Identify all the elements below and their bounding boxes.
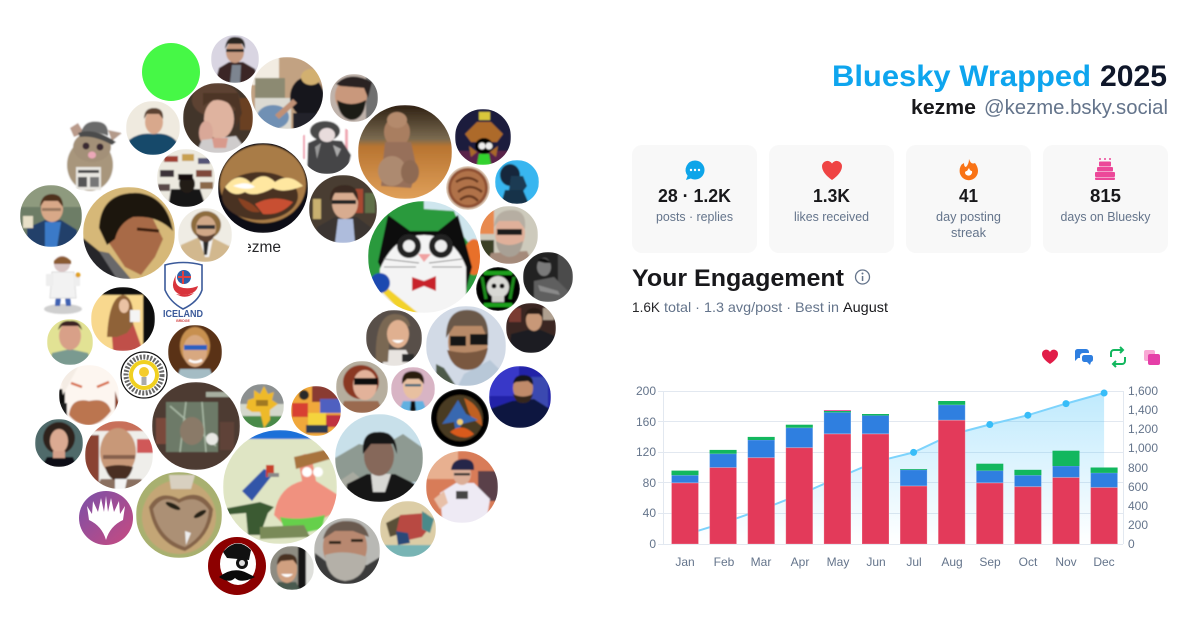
right axis labels xyxy=(1128,384,1158,551)
avatar: man in glasses and blazer xyxy=(211,35,259,83)
stat card: days on Bluesky: 815 xyxy=(1090,186,1121,206)
avatar: smiling man with blue glasses xyxy=(168,325,222,379)
icon: flame xyxy=(960,159,978,180)
icon: likes xyxy=(1042,350,1058,364)
cumulative line xyxy=(685,393,1104,535)
avatar: black-and-white portrait xyxy=(523,252,573,302)
avatar: man in profile with dark hair xyxy=(83,187,175,279)
avatar: red-haired woman in glasses xyxy=(336,361,388,413)
month labels: Aug xyxy=(941,555,963,569)
avatar: Pixies album cover xyxy=(152,382,240,470)
engagement summary: total · 1.3 avg/post · Best in xyxy=(664,299,839,315)
chart grid xyxy=(658,391,1124,544)
stat card: likes received xyxy=(769,145,894,253)
left axis labels: 40 xyxy=(643,506,656,520)
engagement summary xyxy=(632,299,888,315)
icon: chat bubble xyxy=(686,160,705,180)
right axis labels: 0 xyxy=(1128,537,1135,551)
stat card: posts and replies: 28 · 1.2K xyxy=(658,186,731,206)
stat card: day posting streak: day posting xyxy=(936,209,1001,224)
avatar: anime figure in black and white xyxy=(300,120,354,174)
avatar: laughing woman xyxy=(366,310,422,366)
avatar: person with camera before bookshelf xyxy=(157,149,215,207)
right axis labels: 400 xyxy=(1128,499,1148,513)
avatar: angry sun over football team xyxy=(240,384,284,428)
left axis labels: 0 xyxy=(649,537,656,551)
avatar: copper coin xyxy=(446,166,490,210)
icon: reposts xyxy=(1111,347,1125,367)
avatar: older man with grey beard xyxy=(314,518,380,584)
right axis labels: 800 xyxy=(1128,461,1148,475)
avatar: smiling curly-haired woman xyxy=(35,419,83,467)
icon: quotes xyxy=(1144,350,1160,365)
avatar: smiling man by doorway xyxy=(270,546,314,590)
icon: heart xyxy=(822,161,842,180)
avatar: woman resting face on hand xyxy=(183,83,253,153)
month labels: May xyxy=(827,555,849,569)
stat card: days on Bluesky xyxy=(1043,145,1168,253)
left axis labels: 120 xyxy=(636,445,656,459)
avatar: colourful comic art xyxy=(291,386,341,436)
avatar: high-contrast white face with red beard xyxy=(59,365,119,425)
heading: Your Engagement: Your Engagement xyxy=(632,265,844,292)
avatar: man on yellow background xyxy=(47,319,93,365)
stat card: day posting streak: streak xyxy=(951,225,986,240)
avatar: cartoon cat with bow tie xyxy=(368,201,484,313)
right axis labels: 1,000 xyxy=(1128,441,1158,455)
stat card: posts and replies: posts · replies xyxy=(656,209,733,224)
avatar: illustrated map board game xyxy=(380,501,436,557)
month labels: Nov xyxy=(1055,555,1077,569)
avatar: bearded man xyxy=(330,74,378,122)
logo: Iceland shield: BRIDGE xyxy=(176,319,190,323)
avatar: fire pit xyxy=(218,143,308,233)
month labels: Sep xyxy=(979,555,1001,569)
avatar: green skull on black xyxy=(476,267,520,311)
legend icons xyxy=(1042,347,1160,367)
month labels: Mar xyxy=(751,555,771,569)
label: clipped kezme name: kezme xyxy=(235,239,281,256)
icon: info xyxy=(856,270,870,284)
title: 2025 xyxy=(1100,60,1167,93)
avatar: Patrick Star with hammer and saw xyxy=(223,430,338,544)
cumulative area xyxy=(685,393,1104,544)
avatar: man before mountains xyxy=(335,414,423,502)
combo chart xyxy=(636,384,1158,569)
avatar: Magic planeswalker symbol xyxy=(79,491,133,545)
avatar: man in cap and white T-shirt xyxy=(426,451,498,523)
right axis labels: 1,600 xyxy=(1128,384,1158,398)
engagement summary: 1.6K xyxy=(632,299,661,315)
avatar: possum in a hat with newspaper xyxy=(66,120,122,192)
avatar: circular badge with light bulb xyxy=(119,350,169,400)
stat card: day posting streak xyxy=(906,145,1031,253)
avatar: illustrated man on pink pattern xyxy=(391,367,435,411)
stat card: posts and replies xyxy=(632,145,757,253)
left axis labels: 80 xyxy=(643,476,656,490)
avatar: carved figurine on table xyxy=(358,105,452,199)
month labels xyxy=(675,555,1115,569)
right axis labels: 1,400 xyxy=(1128,403,1158,417)
avatar: scientist cartoon figure xyxy=(44,256,82,314)
avatar: grey-bearded man in glasses xyxy=(480,206,538,264)
month labels: Dec xyxy=(1093,555,1115,569)
stat card: days on Bluesky: days on Bluesky xyxy=(1060,209,1151,224)
icon: replies xyxy=(1075,349,1093,365)
right axis labels: 1,200 xyxy=(1128,422,1158,436)
avatar: Marvin the Martian xyxy=(455,109,511,165)
avatar: man in blue suit xyxy=(20,185,82,247)
line points xyxy=(682,390,1108,538)
avatar: woman at terrace table xyxy=(251,57,324,129)
stat card: likes received: likes received xyxy=(794,209,869,224)
left axis labels xyxy=(636,384,656,551)
month labels: Jan xyxy=(675,555,695,569)
avatar: blue silhouette with beard xyxy=(495,160,539,204)
right axis labels: 600 xyxy=(1128,480,1148,494)
month labels: Apr xyxy=(791,555,809,569)
logo: Iceland shield: ICELAND xyxy=(163,309,203,320)
avatar: man in navy sweater xyxy=(126,101,180,155)
avatar: singer on blue-lit stage xyxy=(489,366,551,428)
engagement summary: August xyxy=(843,299,888,315)
avatar: solid green xyxy=(142,43,200,101)
stat card: day posting streak: 41 xyxy=(959,186,978,206)
bubble cluster of avatars xyxy=(20,35,573,595)
left axis labels: 200 xyxy=(636,384,656,398)
avatar: bald man looking down xyxy=(85,421,153,489)
avatar: curly-haired man in trench coat xyxy=(178,208,232,262)
month labels: Jun xyxy=(866,555,886,569)
logo: Iceland shield xyxy=(163,262,203,323)
user name and handle: kezme xyxy=(911,97,976,119)
avatar: barn owl close-up xyxy=(136,472,222,558)
avatar: Natty Boh logo xyxy=(208,537,266,595)
title: Bluesky Wrapped xyxy=(832,60,1091,93)
left axis labels: 160 xyxy=(636,415,656,429)
icon: birthday cake xyxy=(1095,158,1115,180)
avatar: illustrated woman with mug xyxy=(91,287,155,351)
month labels: Feb xyxy=(714,555,735,569)
user name and handle: @kezme.bsky.social xyxy=(984,97,1168,119)
avatar: man with glasses before books xyxy=(309,175,377,243)
avatar: man with bookshelf xyxy=(506,303,556,353)
stat card: likes received: 1.3K xyxy=(813,186,850,206)
stacked bars xyxy=(672,401,1118,544)
right axis labels: 200 xyxy=(1128,518,1148,532)
avatar: man in sunglasses xyxy=(426,306,506,386)
month labels: Oct xyxy=(1019,555,1038,569)
avatar: black ring with pixel art xyxy=(431,389,489,447)
month labels: Jul xyxy=(906,555,922,569)
